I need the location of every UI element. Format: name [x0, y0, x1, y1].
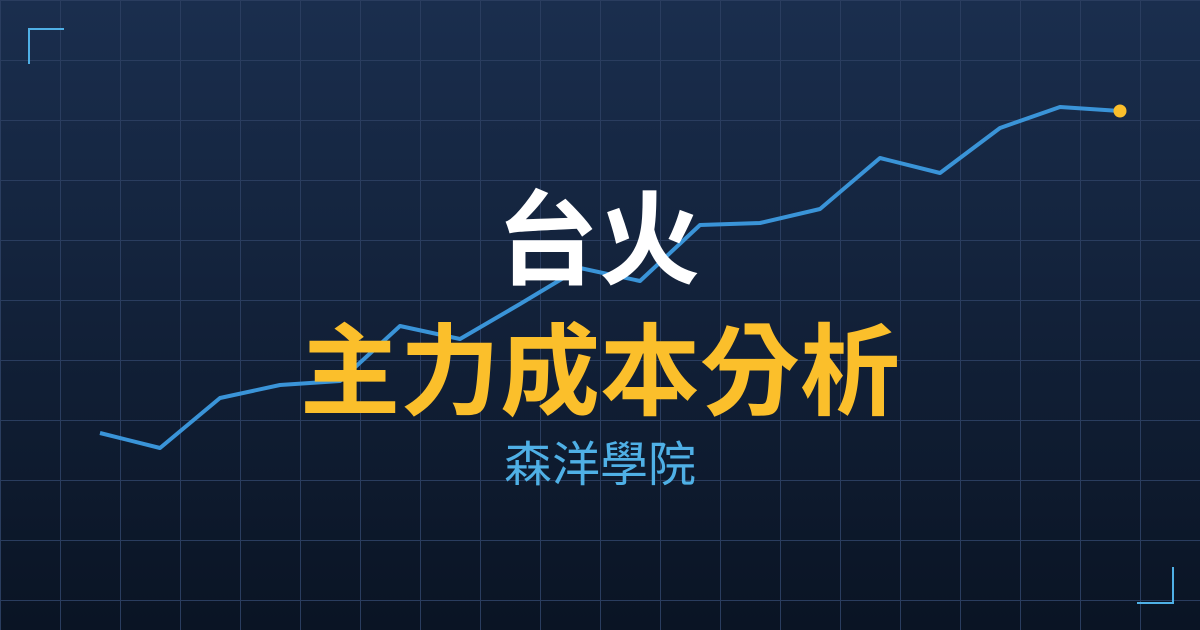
corner bracket: top left: [29, 29, 64, 64]
chart end point: [1114, 104, 1126, 118]
subtitle: brand: 森洋學院: [504, 439, 696, 492]
title: stock name: 台火: [496, 184, 700, 298]
title: main heading: 主力成本分析: [300, 317, 900, 429]
line chart: [100, 104, 1126, 448]
corner bracket: bottom right: [1137, 567, 1173, 603]
